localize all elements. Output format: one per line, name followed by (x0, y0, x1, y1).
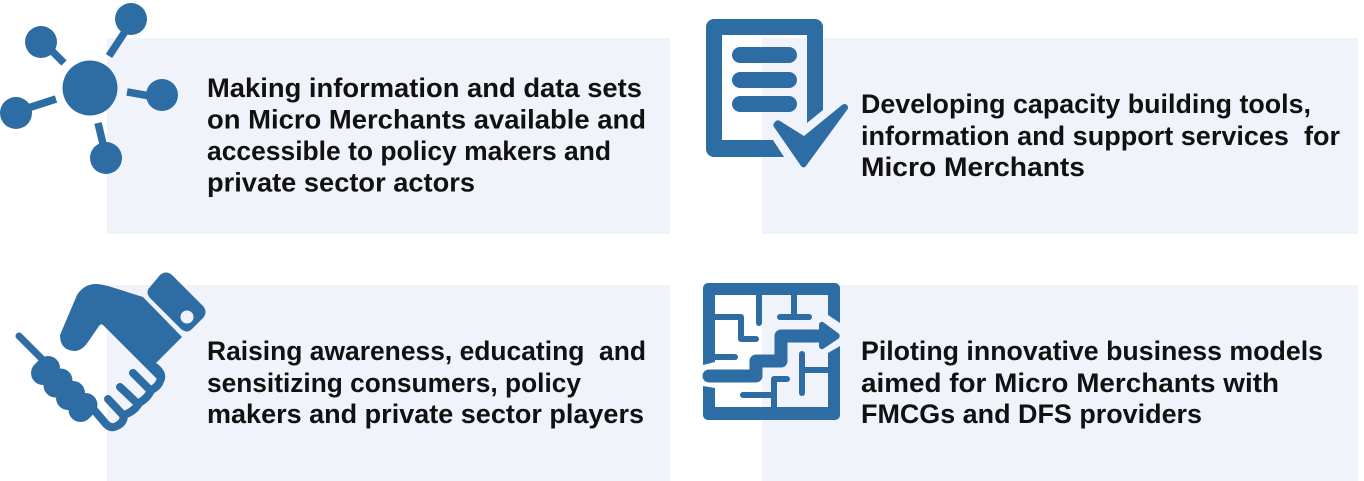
text: capacity building tools: Developing capacity building tools, (861, 89, 1311, 119)
text: information and data sets: Making information and data sets (207, 73, 642, 103)
text: raising awareness: makers and private sector players (207, 399, 644, 429)
text: information and data sets (207, 73, 646, 198)
text: information and data sets: private sector actors (207, 168, 475, 198)
icon: document with checkmark (706, 19, 848, 167)
text: information and data sets: accessible to policy makers and (207, 136, 611, 166)
panel background (762, 38, 1358, 234)
panel background (107, 38, 670, 234)
text: capacity building tools: Micro Merchants (861, 152, 1085, 182)
text: piloting business models: aimed for Micro Merchants with (861, 368, 1279, 398)
text: capacity building tools (861, 89, 1340, 182)
text: raising awareness: sensitizing consumers, policy (207, 368, 581, 398)
text: piloting business models: Piloting innovative business models (861, 336, 1323, 366)
panel: piloting business models (703, 283, 1358, 481)
icon: network nodes (0, 3, 178, 174)
panel: capacity building tools (706, 19, 1358, 234)
panel background (107, 285, 670, 481)
panel: raising awareness (19, 272, 670, 481)
text: capacity building tools: information and support services for (861, 121, 1340, 151)
text: information and data sets: on Micro Merchants available and (207, 104, 646, 134)
text: raising awareness (207, 336, 646, 429)
panel background (762, 285, 1358, 481)
text: piloting business models (861, 336, 1323, 429)
icon: handshake (19, 272, 206, 427)
panel: making information available (0, 3, 670, 234)
icon: maze with arrow (703, 283, 840, 420)
text: piloting business models: FMCGs and DFS providers (861, 399, 1202, 429)
text: raising awareness: Raising awareness, educating and (207, 336, 646, 366)
